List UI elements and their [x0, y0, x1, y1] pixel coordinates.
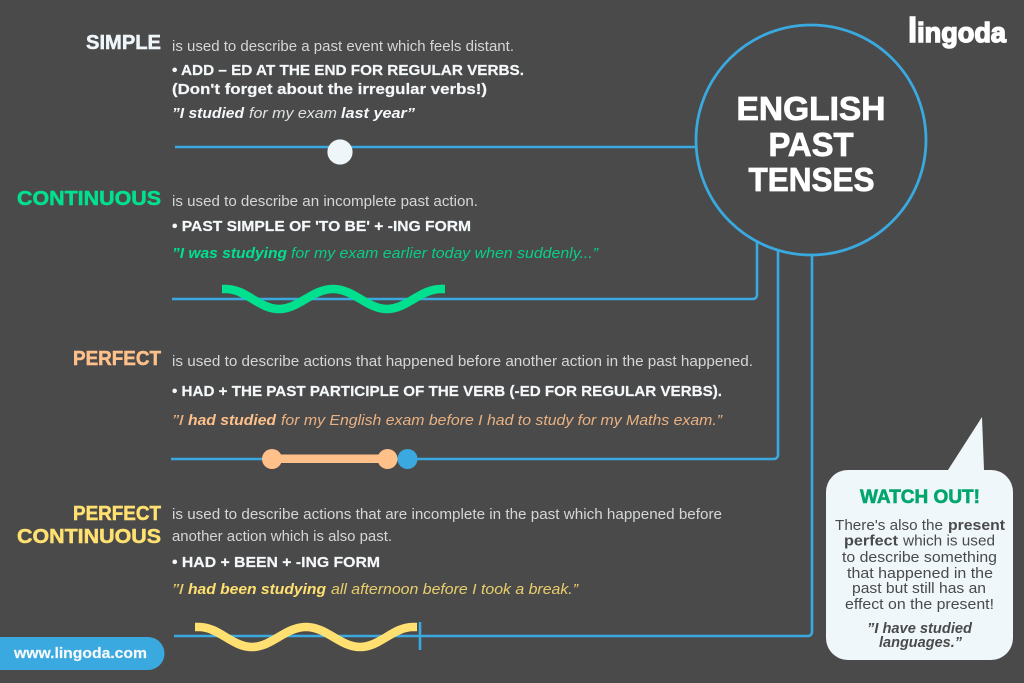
panel: past perfect [73, 348, 753, 469]
callout body: There's also the [835, 518, 943, 534]
panel: past continuous [17, 188, 599, 309]
description: perfect: is used to describe actions that happened before another action in the past happened. [172, 354, 753, 370]
panel: past simple [86, 32, 524, 165]
title circle: PAST [768, 126, 854, 163]
callout body: to describe something [842, 550, 997, 566]
callout body: which is used [902, 534, 995, 550]
timeline marker: two points joined [262, 449, 418, 469]
rule: continuous: • PAST SIMPLE OF 'TO BE' + -ING FORM [172, 219, 471, 235]
panel: past perfect continuous [17, 503, 722, 650]
example: perfect continuous: had been studying [188, 581, 326, 598]
rule: simple: (Don't forget about the irregular verbs!) [172, 82, 487, 98]
callout example [867, 621, 973, 651]
example: simple: last year” [341, 105, 416, 122]
timeline marker: single point [327, 139, 353, 165]
callout body: past but still has an [852, 581, 986, 597]
heading: perfect continuous: CONTINUOUS [17, 526, 161, 548]
example: perfect: for my English exam before I had to study for my Maths exam.” [281, 412, 723, 429]
example: perfect continuous: all afternoon before I took a break.” [331, 581, 579, 598]
callout example: languages.” [879, 635, 963, 651]
callout heading: WATCH OUT! [860, 487, 980, 508]
example: continuous: for my exam earlier today when suddenly...” [291, 245, 599, 262]
heading: perfect: PERFECT [73, 348, 161, 370]
description: perfect continuous: is used to describe actions that are incomplete in the past which happened before [172, 507, 722, 523]
timeline marker: wave with end tick [195, 622, 420, 650]
timeline marker: wave [222, 289, 445, 309]
example: perfect: had studied [188, 412, 277, 429]
description: perfect continuous [172, 507, 722, 545]
rule: simple: • ADD – ED AT THE END FOR REGULAR VERBS. [172, 63, 524, 79]
rule: perfect: • HAD + THE PAST PARTICIPLE OF THE VERB (-ED FOR REGULAR VERBS). [172, 384, 722, 400]
example: perfect: ”I [172, 412, 184, 429]
website pill [0, 637, 164, 670]
title circle: ENGLISH [736, 90, 886, 127]
heading: simple: SIMPLE [86, 32, 161, 54]
rule: perfect continuous: • HAD + BEEN + -ING FORM [172, 555, 380, 571]
example: perfect continuous [172, 581, 579, 598]
callout body: effect on the present! [845, 597, 994, 613]
example: perfect continuous: ”I [172, 581, 184, 598]
description: simple: is used to describe a past event which feels distant. [172, 39, 514, 55]
heading: perfect continuous [17, 503, 161, 548]
example: simple [172, 105, 416, 122]
website pill: www.lingoda.com [13, 645, 147, 662]
title circle: TENSES [748, 161, 874, 198]
logo: lingoda: lingoda [908, 12, 1006, 50]
connector lines from title circle to timelines [171, 147, 812, 636]
title circle [696, 25, 926, 255]
rule: simple [172, 63, 524, 98]
callout body [835, 518, 1005, 613]
heading: continuous: CONTINUOUS [17, 188, 161, 210]
callout body: present [948, 518, 1005, 534]
example: simple: ”I studied [172, 105, 245, 122]
description: perfect continuous: another action which is also past. [172, 529, 392, 545]
example: simple: for my exam [249, 105, 337, 122]
callout body: that happened in the [847, 566, 993, 582]
callout: watch out speech bubble [826, 417, 1013, 660]
callout body: perfect [844, 534, 898, 550]
heading: perfect continuous: PERFECT [73, 503, 161, 525]
callout example: ”I have studied [867, 621, 973, 637]
example: continuous [172, 245, 599, 262]
example: continuous: ”I was studying [172, 245, 287, 262]
description: continuous: is used to describe an incomplete past action. [172, 194, 478, 210]
